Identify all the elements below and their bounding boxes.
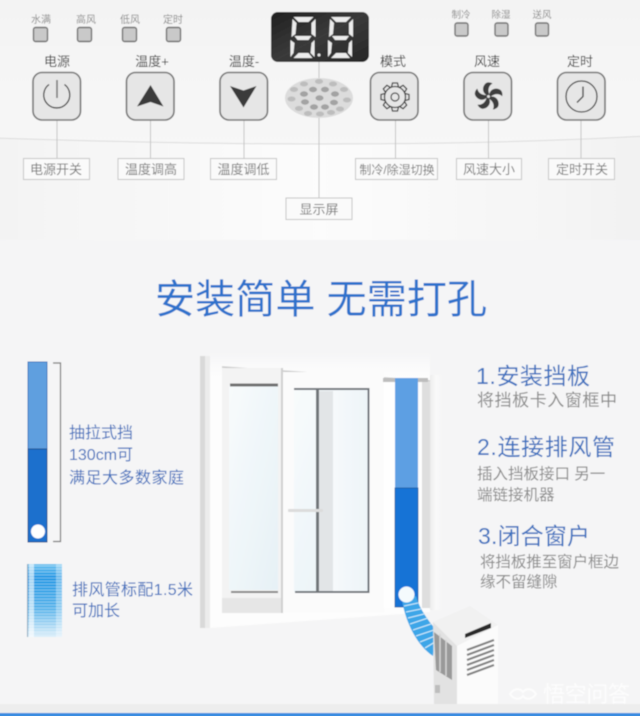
baffle description: 130cm可 xyxy=(69,447,133,464)
display diffuser disc xyxy=(285,78,353,118)
step 2: 端链接机器 xyxy=(477,486,555,504)
indicator lights left: 高风 xyxy=(76,13,96,26)
function labels: 风速大小 xyxy=(463,162,515,177)
indicator lights right: 送风 xyxy=(532,9,552,21)
step 1: 将挡板卡入窗框中 xyxy=(477,391,617,410)
function labels xyxy=(24,158,614,220)
button: temperature down xyxy=(220,72,268,120)
step 3: 3.闭合窗户 xyxy=(478,523,590,549)
portable air conditioner unit xyxy=(433,606,498,704)
button: timer clock xyxy=(558,72,605,120)
button: power xyxy=(33,72,80,120)
window illustration xyxy=(200,354,442,628)
title: 安装简单 无需打孔 xyxy=(155,278,487,322)
button: temperature up xyxy=(126,72,174,120)
hose description: 排风管标配1.5米 xyxy=(72,581,193,599)
step 2 xyxy=(477,434,615,504)
step 3: 缘不留缝隙 xyxy=(480,573,558,591)
baffle description: 抽拉式挡 xyxy=(69,424,133,442)
step 2: 2.连接排风管 xyxy=(477,434,615,460)
button headings: 风速 xyxy=(474,54,500,69)
indicator lights left: 水满 xyxy=(31,14,51,26)
button headings: 模式 xyxy=(380,54,406,69)
button headings: 电源 xyxy=(44,54,70,69)
indicator lights right: 除湿 xyxy=(491,9,511,21)
watermark: 悟空问答 xyxy=(543,682,630,707)
hose to unit xyxy=(398,586,436,656)
step 3 xyxy=(478,523,619,591)
function labels: 电源开关 xyxy=(30,162,82,177)
indicator lights right xyxy=(451,9,552,36)
extendable baffle xyxy=(28,362,47,542)
step 3: 将挡板推至窗户框边 xyxy=(480,553,619,571)
indicator lights left: 定时 xyxy=(163,13,183,26)
step 1: 1.安装挡板 xyxy=(476,363,590,389)
bottom blue bar xyxy=(0,704,640,716)
button headings xyxy=(44,54,593,69)
function labels: 温度调高 xyxy=(125,162,177,177)
background: installation section xyxy=(0,240,640,713)
indicator lights right: 制冷 xyxy=(451,9,471,21)
function labels: 显示屏 xyxy=(299,202,339,217)
indicator lights left: 低风 xyxy=(120,13,140,26)
hose description: 可加长 xyxy=(72,602,120,620)
exhaust hose xyxy=(27,564,62,637)
function labels: 制冷/除湿切换 xyxy=(359,162,435,177)
connector lines xyxy=(57,62,581,198)
button headings: 温度+ xyxy=(135,54,169,69)
background: control panel section xyxy=(0,0,640,240)
baffle description xyxy=(69,424,184,487)
digital display xyxy=(271,12,369,62)
indicator lights left xyxy=(31,13,183,42)
button headings: 温度- xyxy=(229,54,259,69)
button headings: 定时 xyxy=(567,54,593,69)
step 1 xyxy=(476,363,617,410)
button: mode gear xyxy=(370,72,418,120)
hose description xyxy=(72,581,193,620)
step 2: 插入挡板接口 另一 xyxy=(477,465,605,483)
bracket xyxy=(53,363,60,542)
baffle description: 满足大多数家庭 xyxy=(69,469,184,487)
function labels: 定时开关 xyxy=(556,162,608,177)
button: fan speed xyxy=(464,72,512,120)
function labels: 温度调低 xyxy=(217,162,270,177)
baffle in window xyxy=(395,378,418,607)
